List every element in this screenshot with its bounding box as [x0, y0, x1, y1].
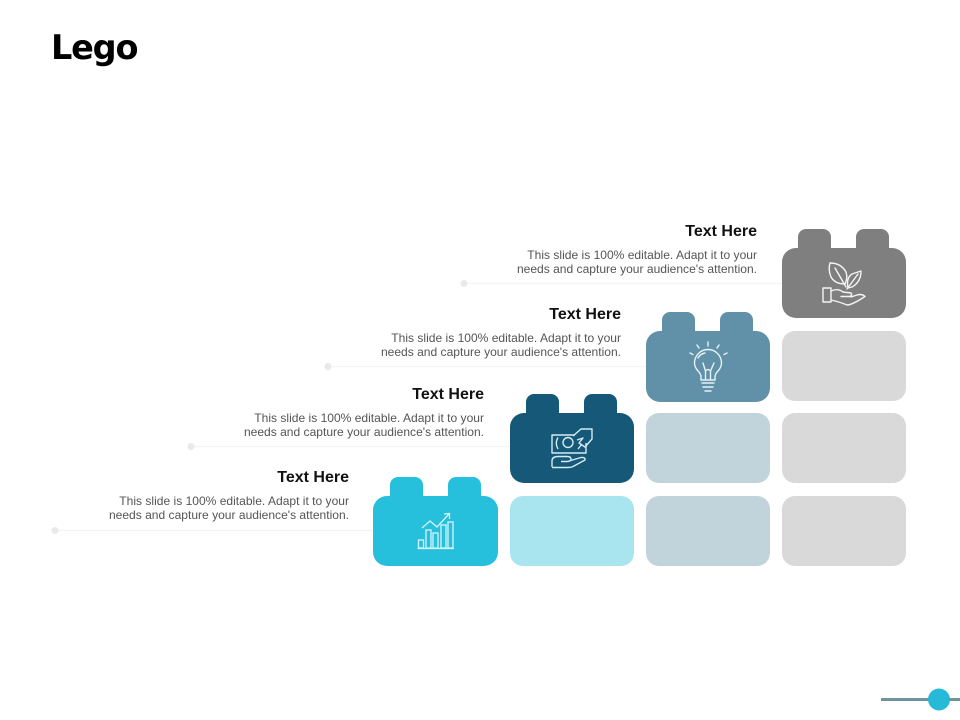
text block 3: needs and capture your audience's attention.	[381, 345, 621, 359]
footer slider decoration	[881, 688, 960, 710]
text block 3: Text Here	[549, 306, 621, 323]
lego block: navy with money icon	[510, 394, 634, 483]
empty block: column 3 row 2	[646, 413, 770, 483]
lego block: steel blue with light bulb icon	[646, 312, 770, 402]
text block 1: Text Here	[277, 469, 349, 486]
connector line 2	[188, 443, 510, 450]
empty block: column 3 row 1	[646, 496, 770, 566]
text block 2: This slide is 100% editable. Adapt it to your	[254, 411, 484, 425]
icon: money in hand	[552, 429, 592, 468]
connector line 1	[52, 527, 373, 534]
text block 1: needs and capture your audience's attention.	[109, 508, 349, 522]
icon: light bulb	[690, 342, 727, 391]
text block 4: This slide is 100% editable. Adapt it to your	[527, 248, 757, 262]
text block 2: Text Here	[412, 386, 484, 403]
empty block: column 2 row 1	[510, 496, 634, 566]
lego block: grey with plant in hand icon	[782, 229, 906, 318]
text block 1	[109, 469, 349, 522]
lego block: cyan with chart icon	[373, 477, 498, 566]
text block 1: This slide is 100% editable. Adapt it to your	[119, 494, 349, 508]
text block 2: needs and capture your audience's attention.	[244, 425, 484, 439]
title: Lego	[51, 28, 137, 67]
connector line 3	[324, 363, 646, 370]
empty block: column 4 row 3	[782, 331, 906, 401]
empty block: column 4 row 1	[782, 496, 906, 566]
empty block: column 4 row 2	[782, 413, 906, 483]
text block 4: needs and capture your audience's attention.	[517, 262, 757, 276]
text block 4: Text Here	[685, 223, 757, 240]
text block 3: This slide is 100% editable. Adapt it to your	[391, 331, 621, 345]
icon: plant in hand	[823, 263, 865, 305]
text block 4	[517, 223, 757, 276]
connector line 4	[460, 280, 782, 287]
text block 3	[381, 306, 621, 359]
text block 2	[244, 386, 484, 439]
icon: growth chart	[418, 514, 454, 548]
